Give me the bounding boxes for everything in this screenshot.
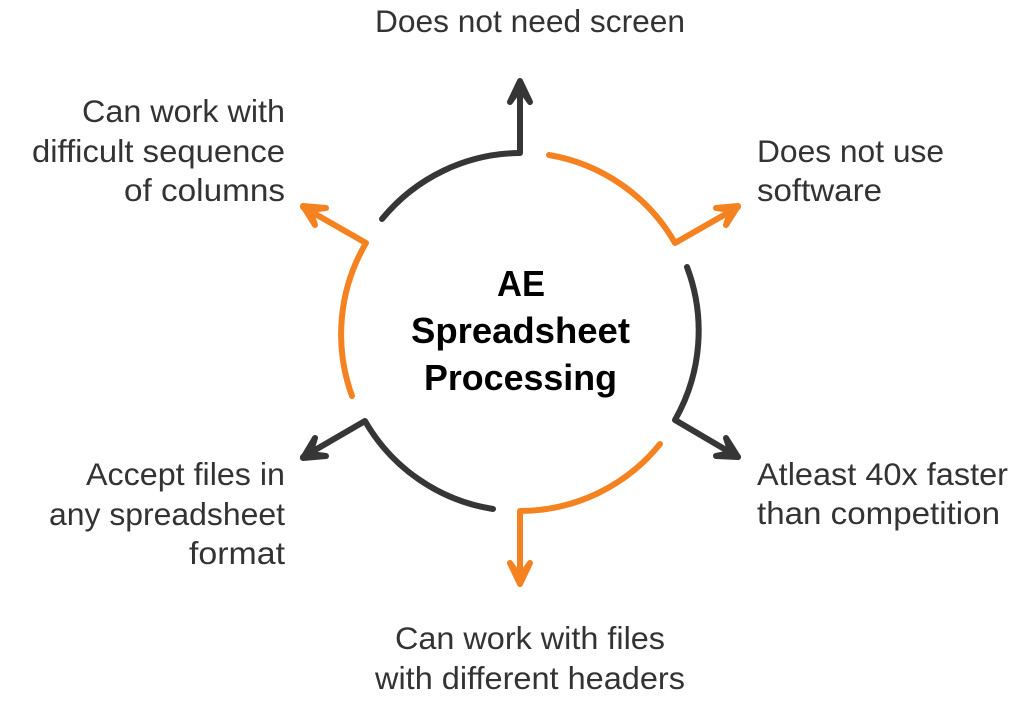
label: atleast 40x faster: than competition (757, 495, 1000, 531)
label: different headers (374, 620, 685, 696)
arc arrow: lower right dark (675, 267, 738, 457)
center title: AE (497, 263, 545, 304)
center title: Spreadsheet (411, 310, 630, 351)
label: does not use software: software (757, 172, 882, 208)
label: difficult sequence: of columns (124, 172, 285, 208)
label: atleast 40x faster (757, 456, 1008, 531)
label: accept files: Accept files in (86, 456, 285, 492)
label: atleast 40x faster: Atleast 40x faster (757, 456, 1008, 492)
arc arrow: upper right orange (549, 155, 738, 243)
label: accept files: format (189, 535, 285, 571)
center title: Processing (424, 357, 617, 398)
label: accept files (49, 456, 285, 571)
center title (411, 263, 630, 398)
arc arrow: lower left dark (303, 421, 493, 509)
label: difficult sequence: Can work with (82, 93, 285, 129)
label: does not need screen: Does not need screen (375, 3, 685, 39)
label: does not use software: Does not use (757, 133, 944, 169)
label: difficult sequence (32, 93, 285, 208)
label: different headers: Can work with files (395, 620, 665, 656)
label: different headers: with different headers (374, 660, 685, 696)
label: accept files: any spreadsheet (49, 496, 285, 532)
label: does not use software (757, 133, 944, 208)
arc arrow: top dark (382, 81, 530, 219)
label: difficult sequence: difficult sequence (32, 133, 285, 169)
arc arrow: upper left orange (303, 206, 366, 396)
arc arrow: bottom orange (510, 444, 660, 584)
